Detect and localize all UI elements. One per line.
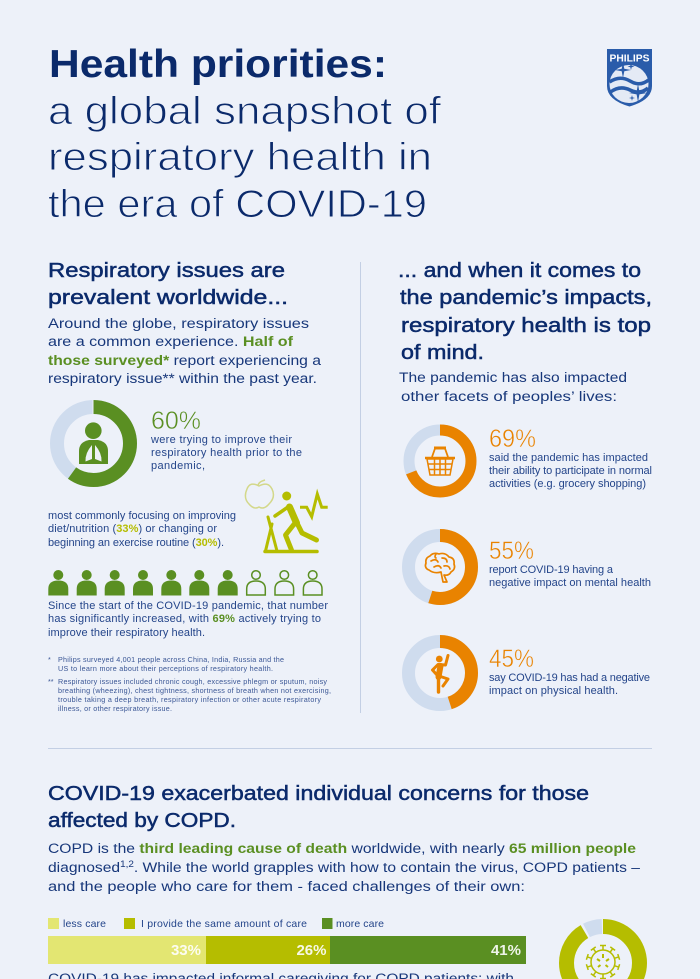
footnotes: illness, or other respiratory issue. — [58, 704, 172, 713]
heading: pandemic impacts: respiratory health is top — [401, 314, 651, 337]
stat: 69%: said the pandemic has impacted — [489, 452, 648, 464]
text block: since the pandemic: Since the start of the COVID-19 pandemic, that number — [48, 600, 328, 612]
footnotes: trouble taking a deep breath, respiratory infection or other acute respiratory — [58, 695, 321, 704]
donut chart: 69% — [409, 430, 471, 492]
footnotes: Philips surveyed 4,001 people across China, India, Russia and the — [58, 655, 284, 664]
stat: 69%: their ability to participate in normal — [489, 465, 652, 477]
donut chart: 55% — [408, 536, 472, 598]
title: Health priorities: — [49, 43, 387, 86]
icon: stretching person — [432, 656, 448, 692]
stat: 60%: pandemic, — [151, 460, 205, 472]
stat: 69%: 69% — [489, 425, 536, 453]
text block: since the pandemic: has significantly increased, with 69% actively trying to — [48, 613, 321, 625]
donut chart: 60% — [57, 400, 130, 480]
icon: brain — [425, 553, 455, 582]
heading: COPD concerns: affected by COPD. — [48, 809, 236, 832]
stat: 55%: negative impact on mental health — [489, 577, 651, 589]
stat: 60%: respiratory health prior to the — [151, 447, 302, 459]
stat: 45%: say COVID-19 has had a negative — [489, 672, 650, 684]
text block: since the pandemic — [48, 600, 328, 639]
heading: respiratory issues: Respiratory issues are — [48, 259, 285, 282]
text block: COPD intro — [48, 841, 640, 895]
stacked bar chart: informal caregiving: 26% — [296, 942, 326, 959]
icon: shopping basket — [425, 448, 455, 475]
icon: person on treadmill with pulse — [265, 492, 328, 552]
heading: respiratory issues — [48, 259, 288, 309]
text block: other facets: other facets of peoples’ lives: — [401, 389, 617, 405]
panel: COPD concerns — [48, 782, 640, 979]
text block: diet and exercise: most commonly focusing on improving — [48, 510, 236, 522]
text block: other facets — [399, 370, 627, 405]
stat: 45% — [489, 645, 650, 697]
icon: Philips shield logo — [607, 49, 652, 106]
footnotes — [48, 655, 331, 713]
footnotes: Respiratory issues included chronic cough, excessive phlegm or sputum, noisy — [58, 677, 327, 686]
stat: 60% — [150, 407, 302, 472]
stat: 55%: report COVID-19 having a — [489, 564, 614, 576]
text block: COPD intro: 1,2 — [120, 859, 134, 869]
stat: 69% — [489, 425, 652, 490]
panel: pandemic impacts — [398, 259, 652, 704]
icon: Philips shield logo: PHILIPS — [610, 54, 650, 64]
stat: 60%: 60% — [151, 407, 201, 435]
heading: pandemic impacts: of mind. — [401, 341, 484, 364]
footnotes: * — [48, 655, 51, 664]
text block: COPD intro: and the people who care for them - faced challenges of their own: — [48, 879, 525, 895]
icon: virus — [586, 946, 620, 978]
footnotes: breathing (wheezing), chest tightness, shortness of breath when not exercising, — [58, 686, 331, 695]
title: respiratory health in — [48, 136, 432, 179]
text block: COPD intro: COPD is the third leading cause of death worldwide, with nearly 65 million people — [48, 841, 636, 857]
heading: COPD concerns — [48, 782, 589, 832]
text block: intro: respiratory issue** within the past year. — [48, 371, 317, 387]
legend: care levels: more care — [336, 918, 384, 930]
heading: respiratory issues: prevalent worldwide... — [48, 286, 288, 309]
legend: care levels: less care — [63, 918, 106, 930]
stat: 55%: 55% — [489, 537, 534, 565]
footnotes: ** — [48, 677, 54, 686]
text block: COPD intro: . While the world grapples with how to contain the virus, COPD patients – — [134, 860, 640, 876]
panel: respiratory issues — [48, 259, 331, 713]
text block: intro: are a common experience. Half of — [48, 334, 293, 350]
stat: 55% — [489, 537, 651, 589]
text block: other facets: The pandemic has also impacted — [399, 370, 627, 386]
stat: 45%: 45% — [489, 645, 534, 673]
donut chart: 45% — [408, 642, 472, 704]
text block: diet and exercise: beginning an exercise routine (30%). — [48, 537, 224, 549]
heading: pandemic impacts: ... and when it comes to — [398, 259, 641, 282]
text block: diet and exercise — [48, 510, 236, 549]
icon: person with lungs — [79, 422, 108, 464]
footnotes: US to learn more about their perceptions of respiratory health. — [58, 664, 273, 673]
text block: intro: Around the globe, respiratory issues — [48, 316, 309, 332]
stat: 69%: activities (e.g. grocery shopping) — [489, 478, 646, 490]
legend: care levels: I provide the same amount of care — [141, 918, 307, 930]
stat: 60%: were trying to improve their — [150, 434, 292, 446]
title — [48, 43, 441, 226]
text block: intro — [48, 316, 321, 387]
heading: pandemic impacts: the pandemic’s impacts, — [400, 286, 652, 309]
text block: diet and exercise: diet/nutrition (33%) or changing or — [48, 523, 217, 535]
legend: care levels — [48, 918, 384, 930]
text block: since the pandemic: improve their respiratory health. — [48, 627, 205, 639]
title: the era of COVID-19 — [48, 183, 427, 226]
heading: pandemic impacts — [398, 259, 652, 364]
stacked bar chart: informal caregiving: 33% — [171, 942, 201, 959]
stat: 45%: impact on physical health. — [489, 685, 618, 697]
stacked bar chart: informal caregiving — [48, 936, 526, 964]
title: a global snapshot of — [48, 90, 441, 133]
stacked bar chart: informal caregiving: 41% — [491, 942, 521, 959]
icon row: 7 of 10 people — [48, 570, 322, 596]
donut chart: virus — [566, 926, 640, 979]
text block: intro: those surveyed* report experiencing a — [48, 353, 321, 369]
icon: apple — [245, 480, 273, 508]
text block: COPD intro: diagnosed — [48, 860, 113, 876]
heading: COPD concerns: COVID-19 exacerbated individual concerns for those — [48, 782, 589, 805]
